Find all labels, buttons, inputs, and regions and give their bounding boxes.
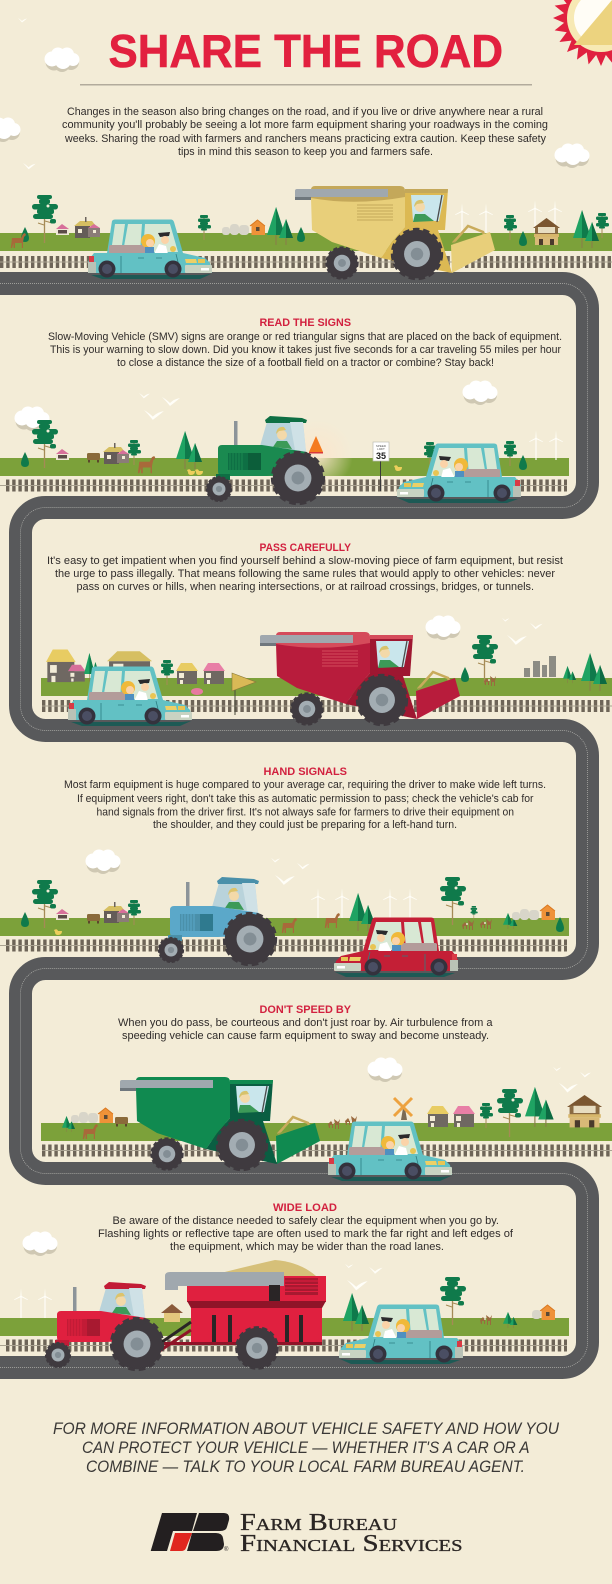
icon: slow-moving vehicle triangle xyxy=(309,436,323,454)
title divider xyxy=(80,84,532,86)
closing call to action: FOR MORE INFORMATION ABOUT VEHICLE SAFETY AND HOW YOU xyxy=(53,1419,560,1438)
scenery xyxy=(46,616,607,695)
red tractor xyxy=(46,1282,163,1370)
yellow road sign xyxy=(232,673,256,715)
hand signals section text: If equipment veers right, don't take this as automatic permission to pass; check the vehicle's cab for xyxy=(77,793,534,805)
clouds and birds around intro xyxy=(0,18,590,169)
grain cart xyxy=(158,1260,326,1369)
icon: FB mark: ® xyxy=(224,1546,229,1553)
teal car xyxy=(68,666,192,726)
icon: speed limit 35 sign xyxy=(373,442,389,491)
title: SHARE THE ROAD xyxy=(108,25,503,77)
intro text: tips in mind this season to keep you and farmers safe. xyxy=(178,146,433,158)
grass and rail fence xyxy=(41,678,612,706)
logo: Farm Bureau Financial Services xyxy=(151,1510,462,1557)
scenery xyxy=(11,195,609,248)
don't speed by section text: When you do pass, be courteous and don't just roar by. Air turbulence from a xyxy=(118,1017,492,1029)
wide load section text: Be aware of the distance needed to safely clear the equipment when you go by. xyxy=(112,1215,499,1227)
scene 2: green tractor with SMV sign and car xyxy=(0,380,569,504)
red car facing left xyxy=(334,918,458,977)
read the signs section text: This is your warning to slow down. Did you know it takes just five seconds for a car traveling 55 miles per hour xyxy=(50,344,561,356)
don't speed by section text: speeding vehicle can cause farm equipment to sway and become unsteady. xyxy=(122,1030,489,1042)
scene 5: green combine and car xyxy=(41,1058,612,1181)
scenery xyxy=(21,850,564,935)
grass and rail fence xyxy=(41,1123,612,1150)
green combine xyxy=(120,1077,320,1170)
scene 3: red combine and car xyxy=(41,616,612,726)
read the signs section text xyxy=(48,317,565,369)
red combine xyxy=(260,632,460,725)
closing call to action: COMBINE — TALK TO YOUR LOCAL FARM BUREAU AGENT. xyxy=(86,1457,525,1476)
pass carefully section text: the urge to pass illegally. That means following the same rules that would apply to other vehicles: never xyxy=(55,568,555,580)
green tractor xyxy=(207,416,324,504)
pass carefully section text: PASS CAREFULLY xyxy=(260,542,352,554)
blue tractor xyxy=(159,877,276,965)
pass carefully section text: pass on curves or hills, when nearing intersections, or at railroad crossings, bridges, or tunnels. xyxy=(76,581,534,593)
read the signs section text: to close a distance the size of a football field on a tractor or combine? Stay back! xyxy=(117,357,494,369)
icon: speed limit 35 sign: SPEED xyxy=(376,444,387,448)
wide load section text: WIDE LOAD xyxy=(273,1202,337,1214)
hand signals section text: hand signals from the driver first. It's not always safe for farmers to drive their equipment on xyxy=(96,806,514,818)
teal car xyxy=(328,1122,452,1181)
icon: FB mark xyxy=(151,1513,229,1553)
teal car facing left xyxy=(397,444,521,503)
intro text: community you'll probably be seeing a lot more farm equipment sharing your roadways in the coming xyxy=(62,119,548,131)
road: winding serpentine through all sections xyxy=(0,284,588,1368)
scene 1: farm landscape with car and yellow combine xyxy=(0,186,612,279)
scenery xyxy=(14,1232,555,1331)
closing call to action: CAN PROTECT YOUR VEHICLE — WHETHER IT'S A CAR OR A xyxy=(82,1438,529,1457)
grass and rail fence xyxy=(0,233,612,262)
scene 6: red tractor towing grain cart and car xyxy=(0,1232,569,1370)
grass and rail fence xyxy=(0,1318,569,1346)
warning glow xyxy=(283,420,353,490)
pass carefully section text xyxy=(47,542,566,593)
grass and rail fence xyxy=(0,918,569,946)
pass carefully section text: It's easy to get impatient when you find yourself behind a slow-moving piece of farm equipment, but resist xyxy=(47,555,563,567)
wordmark: Farm Bureau xyxy=(240,1510,397,1536)
yellow combine xyxy=(295,186,495,279)
hand signals section text: the shoulder, and they could just be preparing for a left-hand turn. xyxy=(153,819,457,831)
hand signals section text: Most farm equipment is huge compared to your average car, requiring the driver to make wide left turns. xyxy=(64,779,546,791)
don't speed by section text: DON'T SPEED BY xyxy=(260,1004,352,1016)
wide load section text: Flashing lights or reflective tape are often used to mark the far right and left edges of xyxy=(98,1228,514,1240)
intro text: weeks. Sharing the road with farmers and ranchers means practicing extra caution. Keep these safety xyxy=(64,133,547,145)
icon: sun xyxy=(553,0,612,66)
wide load section text: the equipment, which may be wider than the road lanes. xyxy=(170,1241,444,1253)
icon: speed limit 35 sign: 35 xyxy=(376,451,386,461)
teal car xyxy=(88,220,212,279)
grass and rail fence xyxy=(0,458,569,486)
read the signs section text: Slow-Moving Vehicle (SMV) signs are orange or red triangular signs that are placed on the back of equipment. xyxy=(48,331,562,343)
hand signals section text: HAND SIGNALS xyxy=(264,766,347,778)
intro text: Changes in the season also bring changes on the road, and if you live or drive anywhere near a rural xyxy=(67,106,543,118)
scenery xyxy=(14,380,563,475)
wordmark: Financial Services xyxy=(240,1531,462,1557)
scene 4: blue tractor and red car xyxy=(0,850,569,977)
icon: speed limit 35 sign: LIMIT xyxy=(377,447,385,451)
teal car facing left xyxy=(339,1304,463,1364)
read the signs section text: READ THE SIGNS xyxy=(260,317,351,329)
scenery xyxy=(62,1058,602,1139)
wide load section text xyxy=(98,1202,516,1253)
don't speed by section text xyxy=(118,1004,496,1042)
hand signals section text xyxy=(64,766,549,831)
